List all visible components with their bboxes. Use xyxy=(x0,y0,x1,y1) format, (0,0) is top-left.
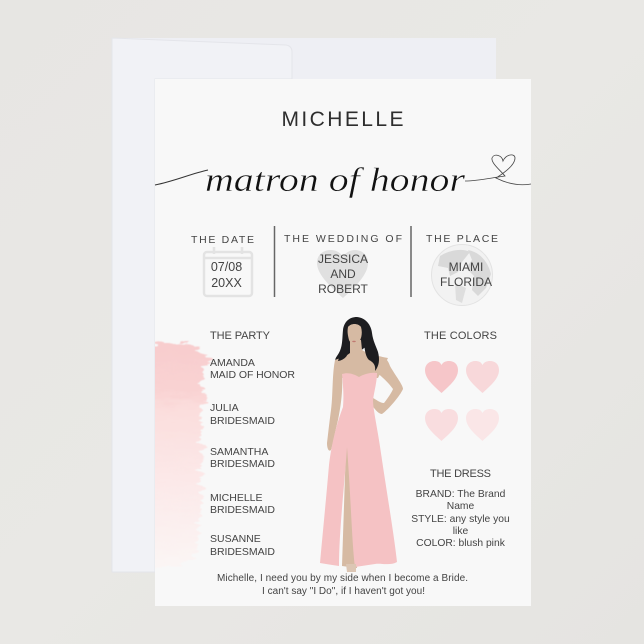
panel: the date: 20XX xyxy=(211,276,242,290)
face xyxy=(348,324,362,344)
hair left strand xyxy=(338,322,349,361)
dress details xyxy=(411,489,510,549)
panel: the date: 07/08 xyxy=(211,260,242,274)
script title xyxy=(155,155,531,199)
dress details: STYLE: any style you xyxy=(411,514,510,525)
panel: the date xyxy=(191,234,254,296)
member: susanne: BRIDESMAID xyxy=(210,546,275,558)
hair back xyxy=(335,317,368,362)
member: julia xyxy=(210,402,275,427)
colors panel xyxy=(424,330,499,441)
panel: the date: THE DATE xyxy=(191,234,254,246)
panel: the place xyxy=(426,233,498,306)
panel: the place: THE PLACE xyxy=(426,233,498,245)
member: amanda: AMANDA xyxy=(210,357,255,369)
party list xyxy=(210,330,295,558)
footer message: I can't say "I Do", if I haven't got you! xyxy=(262,586,425,597)
footer message xyxy=(217,573,468,597)
member: amanda xyxy=(210,357,295,381)
dress details: like xyxy=(453,526,468,537)
heart swatch 4 xyxy=(466,409,499,441)
heading: the party: THE PARTY xyxy=(210,330,271,342)
panel: the wedding of: AND xyxy=(330,267,356,281)
divider xyxy=(410,226,412,297)
member: michelle xyxy=(210,492,275,516)
dress details: Name xyxy=(447,501,475,512)
heart swatch 1 xyxy=(425,361,458,393)
panel: the wedding of: JESSICA xyxy=(318,252,368,266)
panel: the wedding of: THE WEDDING OF xyxy=(284,233,402,245)
member: susanne: SUSANNE xyxy=(210,533,261,545)
member: amanda: MAID OF HONOR xyxy=(210,369,295,381)
dress details: COLOR: blush pink xyxy=(416,538,506,549)
chest and shoulders xyxy=(335,340,388,378)
heading: the dress: THE DRESS xyxy=(430,468,491,480)
dress details: BRAND: The Brand xyxy=(416,489,506,500)
leg xyxy=(342,445,358,568)
lips xyxy=(352,341,356,342)
member: susanne xyxy=(210,533,275,558)
member: michelle: MICHELLE xyxy=(210,492,263,504)
footer message: Michelle, I need you by my side when I become a Bride. xyxy=(217,573,468,584)
panel: the wedding of xyxy=(284,233,402,298)
left arm xyxy=(327,360,342,451)
figure: woman in pink dress xyxy=(320,317,403,572)
icon: heart flourish xyxy=(465,155,531,185)
heading: the colors: THE COLORS xyxy=(424,330,497,342)
member: samantha xyxy=(210,446,275,470)
hair front right xyxy=(357,317,379,371)
shoe xyxy=(346,564,356,572)
icon: globe xyxy=(432,244,492,306)
heart swatch 2 xyxy=(466,361,499,393)
divider xyxy=(274,226,276,297)
script title: matron of honor xyxy=(205,162,466,199)
panel: the place: MIAMI xyxy=(449,260,483,274)
member: samantha: SAMANTHA xyxy=(210,446,268,458)
card xyxy=(145,79,531,606)
brush stroke xyxy=(155,340,213,536)
heart swatch 3 xyxy=(425,409,458,441)
member: samantha: BRIDESMAID xyxy=(210,458,275,470)
name heading: MICHELLE xyxy=(282,108,404,131)
member: julia: JULIA xyxy=(210,402,239,414)
panel: the place: FLORIDA xyxy=(440,275,492,289)
icon: heart xyxy=(317,250,368,298)
member: julia: BRIDESMAID xyxy=(210,415,275,427)
panel: the wedding of: ROBERT xyxy=(318,282,369,296)
member: michelle: BRIDESMAID xyxy=(210,504,275,516)
icon: calendar xyxy=(204,247,252,296)
dress xyxy=(320,373,397,567)
right arm xyxy=(371,357,403,414)
dress panel xyxy=(411,468,510,549)
envelope back xyxy=(112,38,496,572)
